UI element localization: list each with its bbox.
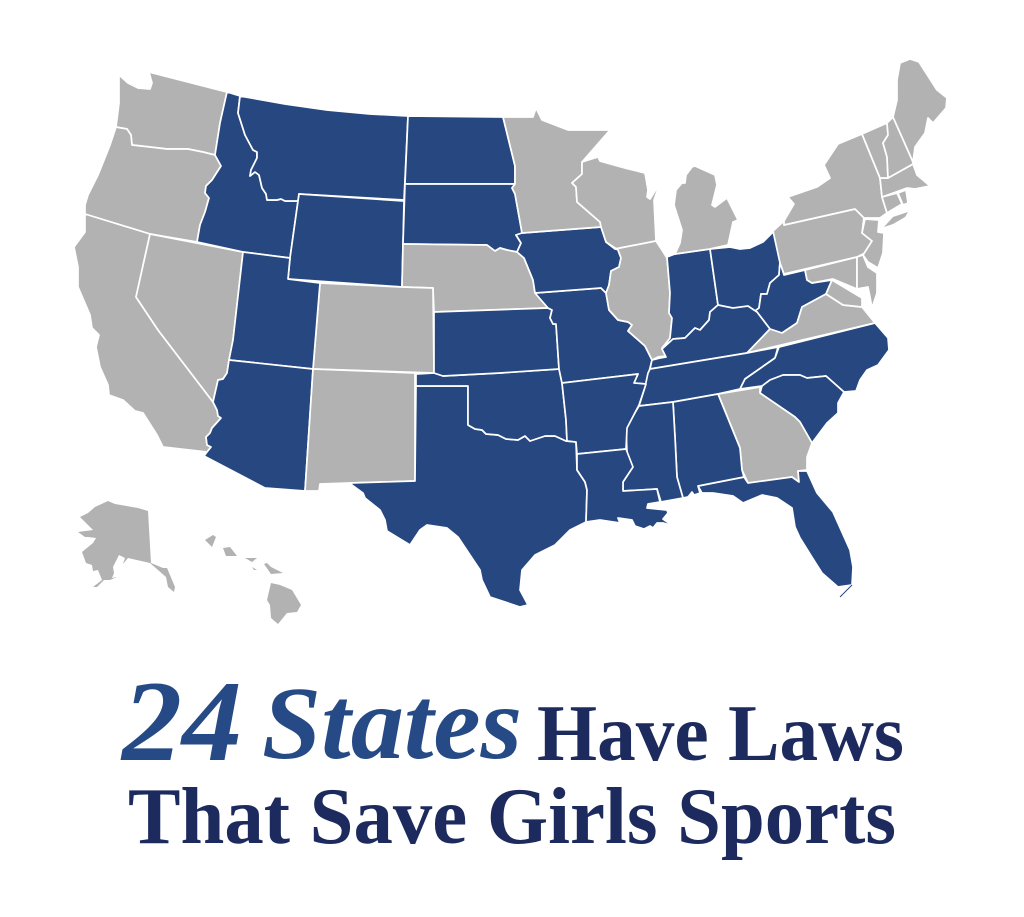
state: Oklahoma: [416, 369, 567, 441]
state: New Hampshire: [883, 117, 913, 178]
state: New Mexico: [305, 369, 415, 491]
state: Georgia: [718, 387, 812, 483]
island: Florida Keys: [840, 585, 852, 597]
state: Maryland: [805, 257, 857, 289]
state: Wyoming: [288, 194, 404, 287]
state: Washington: [116, 72, 227, 155]
state: Utah: [229, 252, 320, 369]
state: Maine: [893, 59, 947, 162]
state: Michigan: [674, 166, 738, 254]
title line 2: That Save Girls Sports: [128, 773, 896, 861]
state: Louisiana: [577, 449, 673, 529]
title line 1 remainder: Have Laws: [537, 690, 904, 778]
state: North Carolina: [740, 323, 889, 392]
state: North Dakota: [405, 116, 515, 184]
title highlight: 24 States: [120, 658, 522, 785]
map of United States: [74, 59, 947, 624]
state: Oregon: [85, 127, 221, 242]
state: Massachusetts: [880, 164, 930, 197]
state: Idaho: [197, 92, 298, 258]
state: Minnesota: [503, 108, 610, 233]
state: Connecticut: [882, 193, 902, 213]
state: South Carolina: [760, 375, 844, 443]
state: Tennessee: [639, 347, 778, 406]
state: Indiana: [662, 249, 718, 349]
state: Alabama: [673, 394, 744, 498]
state: Missouri: [535, 288, 652, 384]
state: South Dakota: [403, 184, 522, 252]
state: Northern Virginia: [826, 280, 862, 307]
state: Vermont: [862, 123, 888, 178]
state: Pennsylvania: [773, 209, 872, 274]
state: Texas: [350, 386, 587, 607]
state: West Virginia: [755, 262, 832, 333]
state: Florida: [698, 471, 853, 587]
island: Long Island: [884, 212, 908, 227]
state: New York: [784, 134, 887, 225]
state: Nevada: [136, 234, 243, 402]
state: Iowa: [516, 227, 621, 293]
state: Mississippi: [623, 402, 683, 502]
state: Hawaii: [205, 535, 301, 624]
state: Illinois: [606, 241, 672, 360]
state: Montana: [238, 96, 408, 201]
state: Virginia: [747, 294, 875, 353]
state: California: [74, 214, 221, 452]
state: Delaware and Delmarva: [857, 255, 877, 308]
title highlight: 24 States: States: [262, 666, 522, 781]
title highlight: 24 States: 24: [120, 658, 242, 785]
state: Nebraska: [402, 244, 548, 312]
state: Rhode Island: [898, 190, 908, 205]
title: [120, 658, 904, 861]
state: Wisconsin: [572, 157, 660, 249]
state: Alaska: [78, 501, 175, 592]
state: Ohio: [710, 231, 780, 311]
state: Arkansas: [562, 374, 646, 454]
state: Arizona: [204, 360, 313, 491]
state: Kansas: [434, 308, 559, 376]
state: Kentucky: [650, 305, 770, 369]
state: Colorado: [313, 283, 434, 373]
state: New Jersey: [862, 219, 884, 268]
